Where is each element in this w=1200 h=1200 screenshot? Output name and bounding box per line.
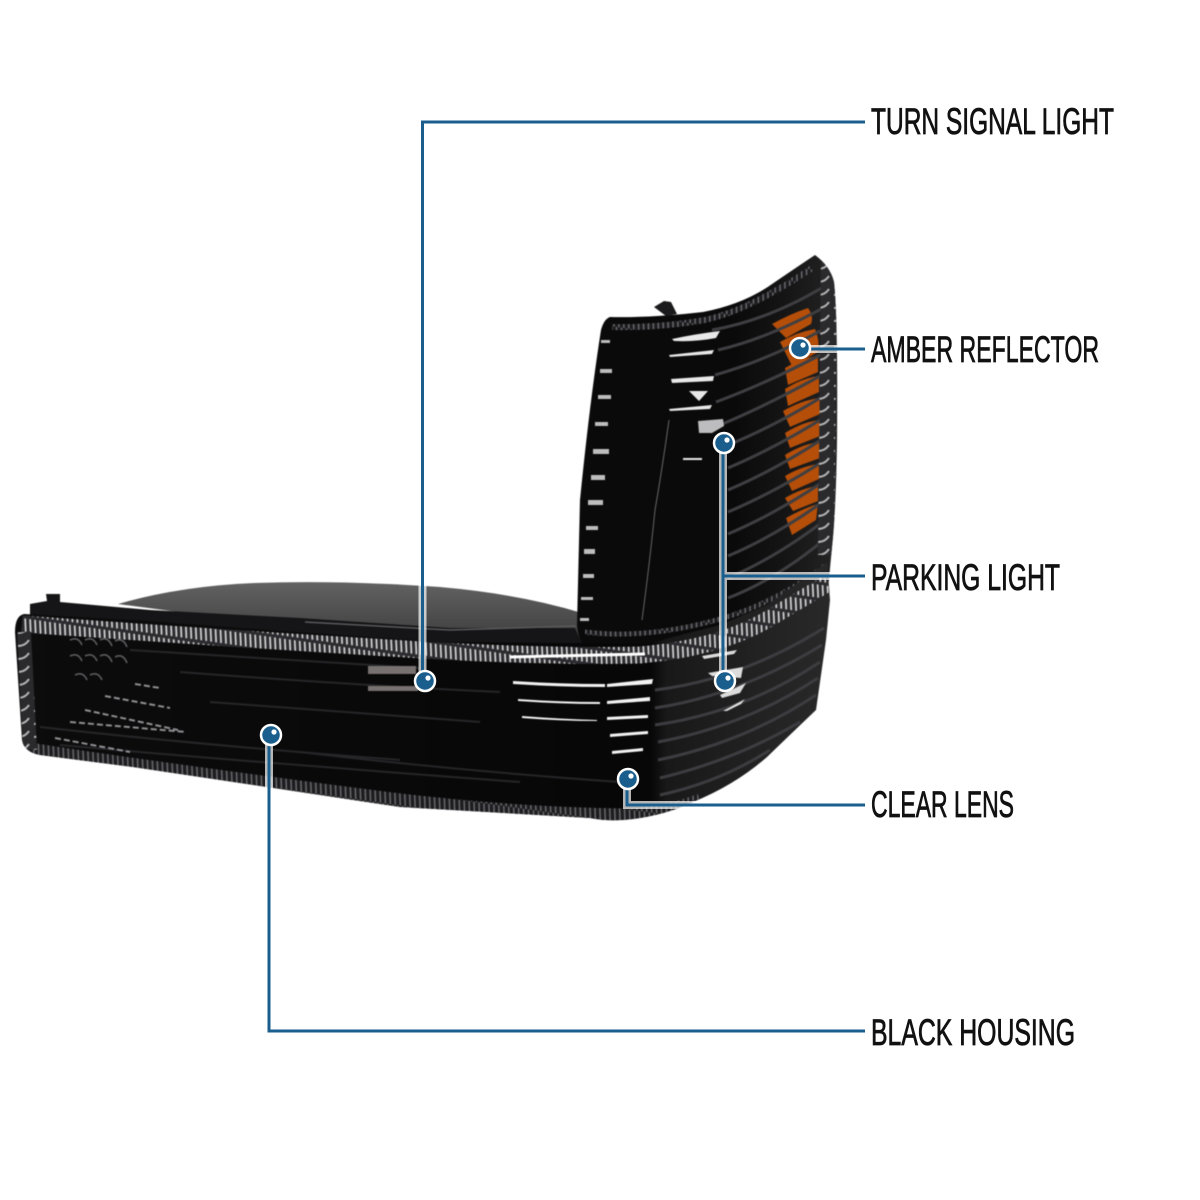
- top ribbed edge: [612, 268, 812, 327]
- leader: black housing: [269, 735, 865, 1031]
- top ribbed band: [22, 583, 828, 656]
- right edge scallops: [826, 262, 829, 555]
- crack line: [642, 420, 669, 620]
- horizontal streaks: [40, 650, 620, 782]
- lower bumper lens: [15, 562, 830, 820]
- leader: parking light: [723, 443, 865, 681]
- rear housing: [30, 582, 585, 650]
- callout leaders: [269, 122, 865, 1031]
- leader: amber reflector: [800, 345, 865, 353]
- dot: parking light upper: [714, 433, 734, 453]
- upper corner lens: [577, 255, 837, 660]
- curved corner ribs: [655, 628, 824, 795]
- leader: turn signal light: [422, 122, 865, 681]
- lens scale reflections: [70, 639, 127, 680]
- amber reflector: [772, 308, 820, 535]
- dot: clear lens: [618, 769, 638, 789]
- dot: black housing: [261, 725, 281, 745]
- lower lens arc: [585, 565, 826, 634]
- dot: parking light lower: [715, 671, 735, 691]
- corner highlights: [702, 650, 746, 711]
- dot: turn signal light: [415, 671, 435, 691]
- connector tab: [654, 301, 677, 316]
- lens ribs: [712, 283, 836, 598]
- top reflections: [669, 331, 724, 460]
- turn signal reflections: [368, 666, 418, 691]
- label: black housing: BLACK HOUSING: [871, 1012, 1075, 1053]
- dot: amber reflector: [790, 338, 810, 358]
- left edge ticks: [580, 340, 612, 621]
- bottom ribbed band: [30, 749, 700, 815]
- left edge scallops: [24, 632, 30, 750]
- product photo: bumper light assembly: [15, 255, 837, 820]
- infographic canvas: [14, 108, 1114, 1046]
- label: clear lens: CLEAR LENS: [871, 784, 1014, 825]
- leader: clear lens: [627, 779, 865, 805]
- center white highlights: [513, 679, 653, 754]
- callout dots: [261, 338, 810, 789]
- label: parking light: PARKING LIGHT: [871, 557, 1060, 598]
